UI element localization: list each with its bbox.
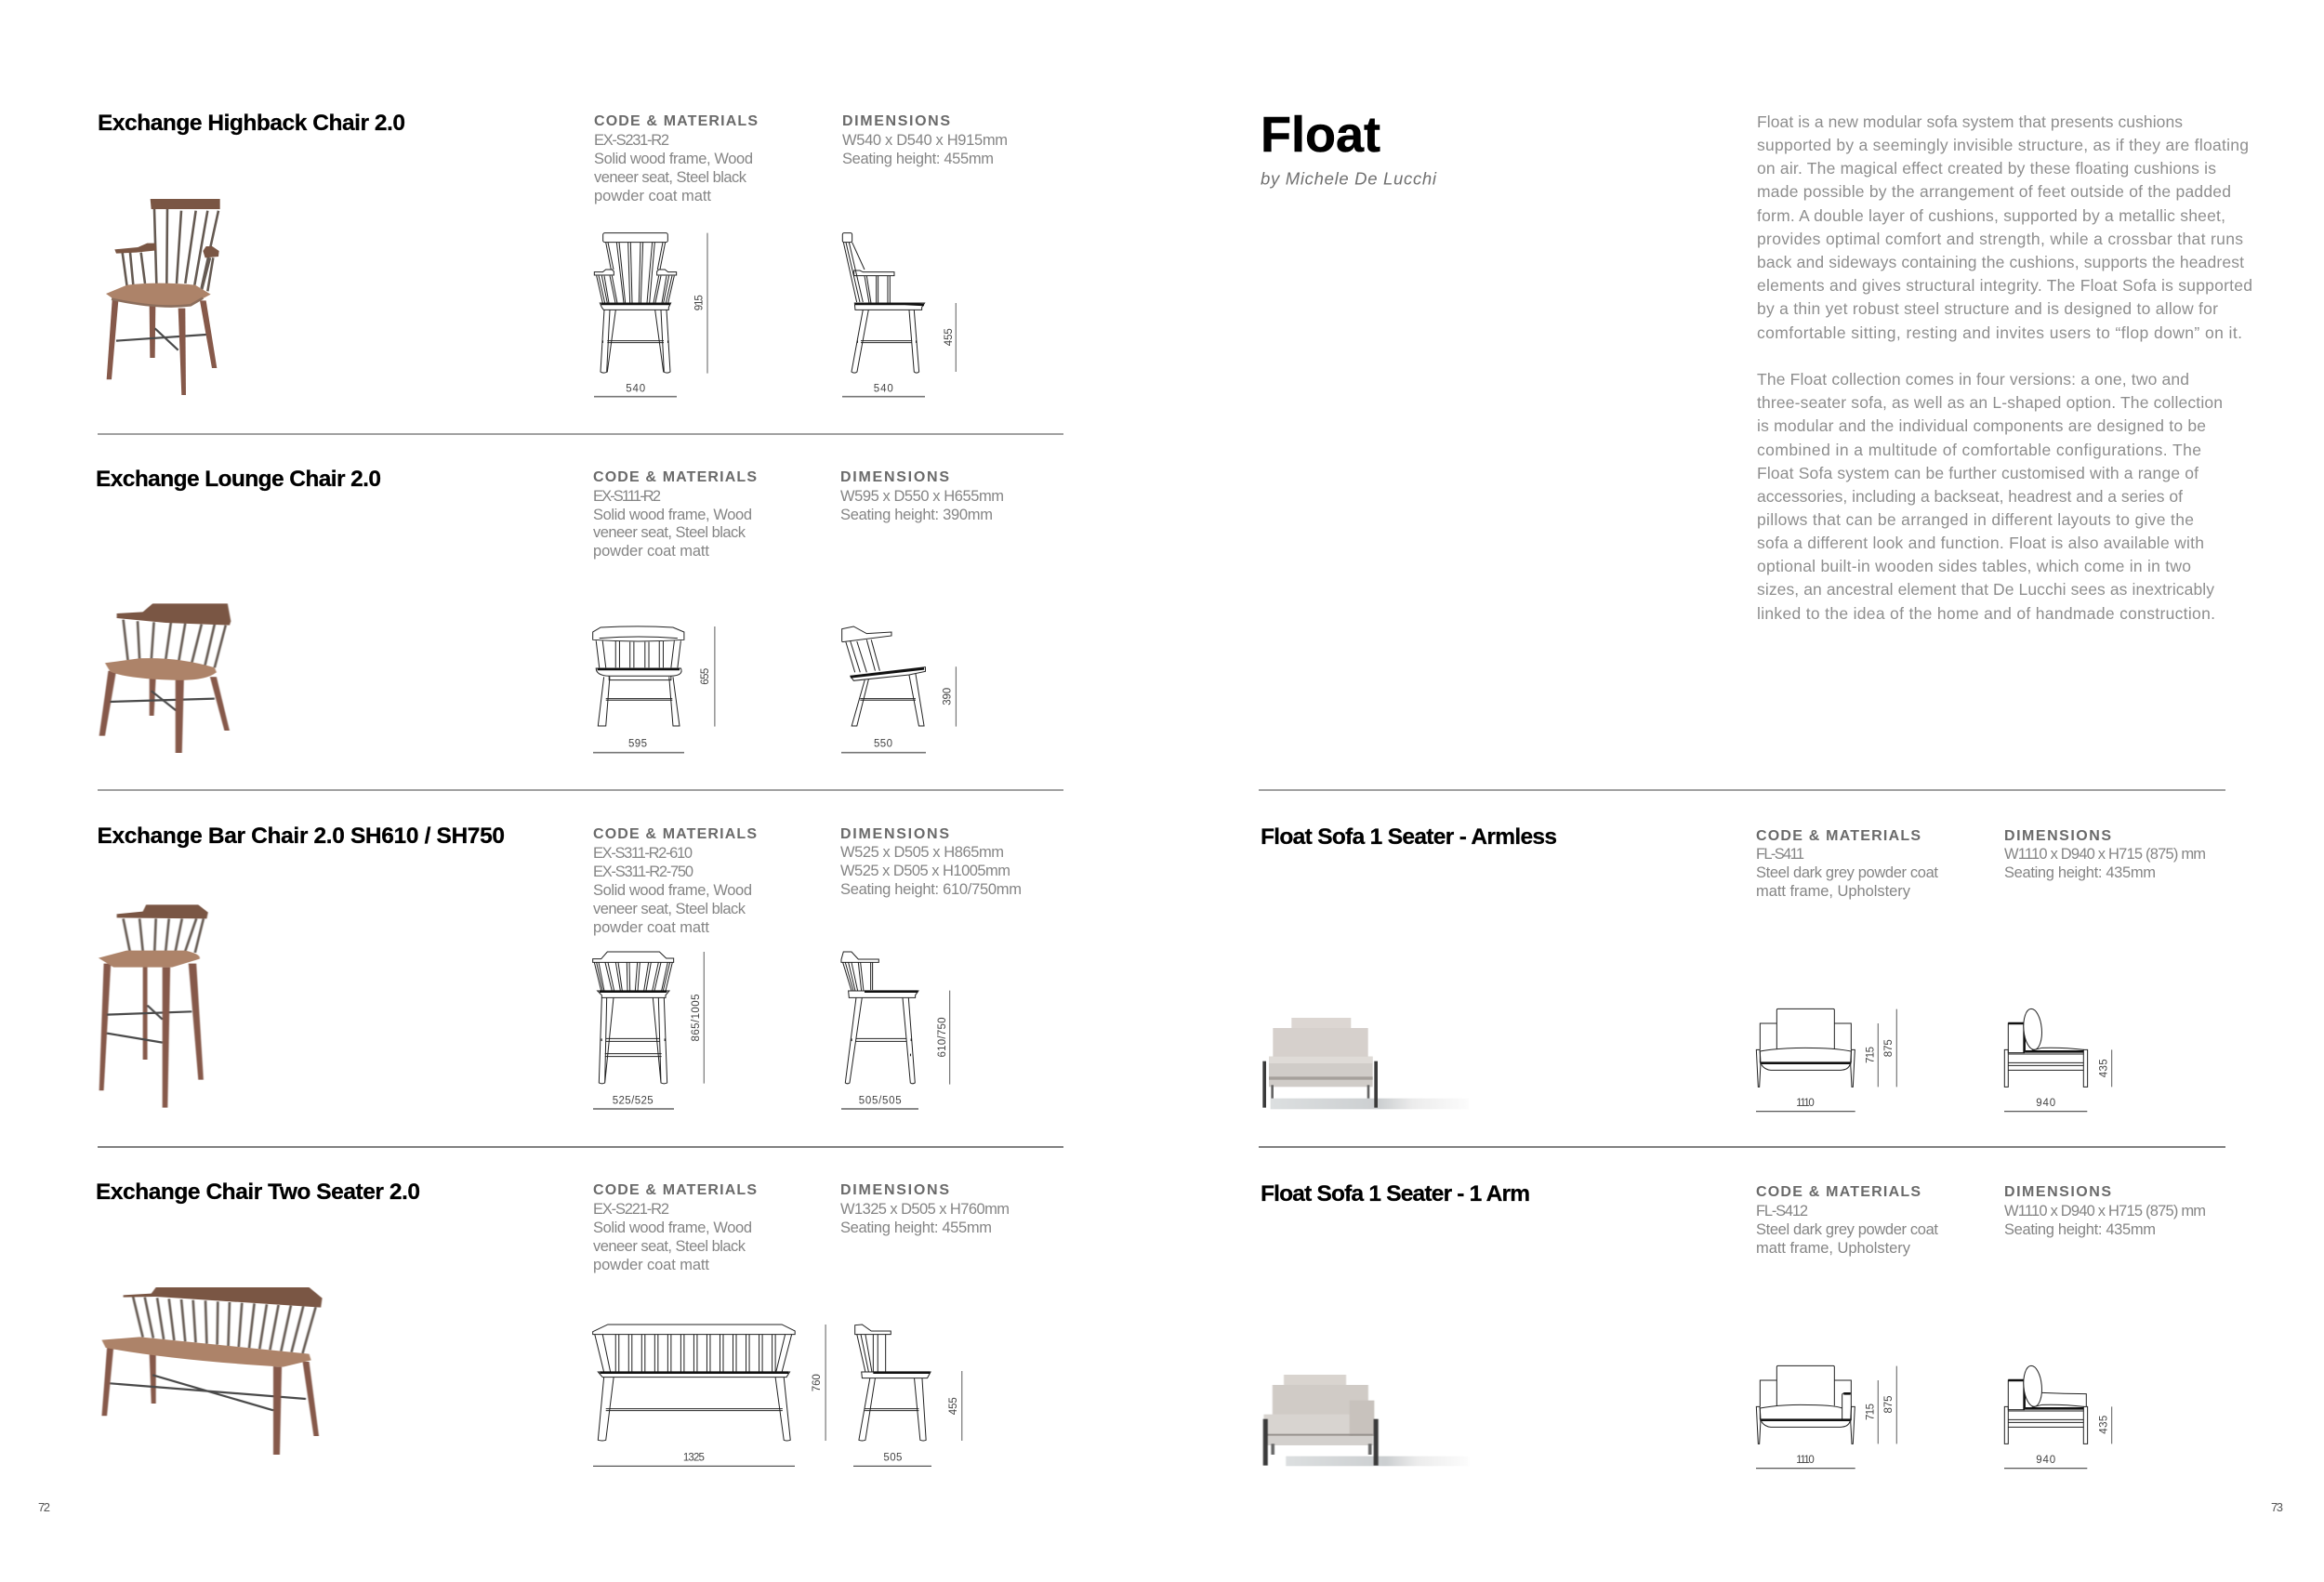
width rules: [593, 752, 926, 754]
drawing: one arm sofa front view: [1756, 1365, 1855, 1444]
dimension: width front: 595: [628, 738, 647, 749]
drawing: bar chair side view: [841, 952, 918, 1084]
dimension: seat height: 455: [944, 328, 955, 346]
paragraph two: The Float collection comes in four versions: a one, two and: [1757, 370, 2189, 389]
product title: Exchange Lounge Chair 2.0: [96, 467, 381, 492]
dimension: seat height: 435: [2099, 1416, 2110, 1434]
dimension: seat height: 610/750: [937, 1017, 948, 1058]
text: code and materials: [593, 1201, 752, 1273]
dimension lines: [1878, 1366, 2112, 1444]
drawing: two seater side view: [855, 1325, 931, 1441]
text: code and materials: powder coat matt: [593, 919, 709, 936]
width rules: [594, 396, 925, 398]
heading: code and materials: CODE & MATERIALS: [593, 1182, 757, 1198]
dimension: width side: 940: [2036, 1098, 2055, 1109]
dimension: height: 655: [700, 668, 711, 685]
paragraph two: linked to the idea of the home and of handmade construction.: [1757, 604, 2215, 623]
text: code and materials: [1756, 1203, 1938, 1257]
product title: Float Sofa 1 Seater - 1 Arm: [1261, 1181, 1530, 1206]
text: dimensions: [840, 1201, 1010, 1236]
dimension: seat height: 435: [2099, 1059, 2110, 1077]
text: code and materials: Steel dark grey powder coat: [1756, 864, 1938, 881]
width rules: [1756, 1111, 2087, 1113]
dimension: width front: 525/525: [613, 1096, 654, 1107]
drawing: armless sofa front view: [1756, 1009, 1855, 1087]
dimension: width side: 540: [874, 384, 893, 395]
dimension: width side: 505/505: [859, 1096, 902, 1107]
text: dimensions: Seating height: 455mm: [842, 151, 994, 167]
text: code and materials: veneer seat, Steel black: [594, 169, 747, 186]
text: dimensions: W595 x D550 x H655mm: [840, 488, 1004, 505]
main title: Float: [1261, 107, 1380, 163]
heading: dimensions: DIMENSIONS: [840, 826, 949, 842]
text: code and materials: Solid wood frame, Wood: [593, 882, 752, 899]
heading: dimensions: DIMENSIONS: [842, 113, 950, 129]
photo: one arm sofa: [1263, 1375, 1468, 1466]
text: code and materials: Steel dark grey powder coat: [1756, 1221, 1938, 1238]
panel: Exchange Lounge Chair 2.0: [96, 467, 1004, 753]
text: dimensions: W1110 x D940 x H715 (875) mm: [2004, 846, 2206, 863]
paragraph two: sizes, an ancestral element that De Lucchi sees as inextricably: [1757, 580, 2214, 599]
width rules: [593, 1465, 931, 1467]
heading: dimensions: DIMENSIONS: [2004, 828, 2111, 844]
paragraph one: made possible by the arrangement of feet outside of the padded: [1757, 182, 2231, 201]
photo: lounge chair: [99, 603, 231, 753]
text: dimensions: W525 x D505 x H1005mm: [840, 863, 1010, 879]
drawing: bar chair front view: [593, 952, 674, 1084]
text: dimensions: Seating height: 390mm: [840, 507, 993, 523]
text: code and materials: EX-S231-R2: [594, 132, 669, 149]
dimension lines: [704, 952, 950, 1085]
text: dimensions: Seating height: 435mm: [2004, 1221, 2156, 1238]
dimension: height: 915: [694, 295, 706, 310]
dimension: seat height: 390: [943, 688, 954, 705]
photo: bar chair: [99, 904, 208, 1108]
paragraph two: is modular and the individual components are designed to be: [1757, 416, 2206, 435]
drawing: lounge chair front view: [593, 626, 684, 726]
paragraph two: accessories, including a backseat, headrest and a series of: [1757, 487, 2183, 506]
paragraph one: comfortable sitting, resting and invites users to “flop down” on it.: [1757, 323, 2242, 342]
text: code and materials: veneer seat, Steel black: [593, 1238, 746, 1255]
panel: Float introduction: [1261, 107, 2252, 623]
text: dimensions: [842, 132, 1008, 167]
text: dimensions: [2004, 1203, 2206, 1238]
drawing: highback chair front view: [594, 233, 677, 373]
paragraph two: Float Sofa system can be further customised with a range of: [1757, 464, 2199, 482]
paragraph two: pillows that can be arranged in different layouts to give the: [1757, 510, 2194, 529]
width rules: [593, 1108, 918, 1110]
paragraph one: Float is a new modular sofa system that presents cushions: [1757, 112, 2183, 131]
product title: Exchange Highback Chair 2.0: [98, 111, 405, 136]
heading: code and materials: CODE & MATERIALS: [1756, 1184, 1921, 1200]
text: code and materials: [594, 132, 753, 204]
text: dimensions: Seating height: 435mm: [2004, 864, 2156, 881]
dimension lines: [1878, 1009, 2112, 1087]
text: code and materials: [593, 488, 752, 560]
paragraph two: [1757, 370, 2223, 623]
dimension lines: [707, 233, 956, 374]
text: code and materials: powder coat matt: [593, 1257, 709, 1273]
text: code and materials: matt frame, Upholstery: [1756, 883, 1911, 900]
text: code and materials: EX-S221-R2: [593, 1201, 669, 1218]
panel: Float Sofa 1 Seater 1 Arm: [1261, 1181, 2206, 1469]
dimension: height with pillow: 875: [1883, 1396, 1895, 1413]
text: code and materials: Solid wood frame, Wood: [593, 1219, 752, 1236]
paragraph one: [1757, 112, 2252, 342]
paragraph one: provides optimal comfort and strength, while a crossbar that runs: [1757, 230, 2243, 248]
paragraph two: optional built-in wooden sides tables, which come in in two: [1757, 557, 2191, 575]
text: code and materials: [1756, 846, 1938, 900]
drawing: lounge chair side view: [842, 626, 925, 726]
width rules: [1756, 1468, 2087, 1470]
text: dimensions: [840, 844, 1022, 898]
heading: dimensions: DIMENSIONS: [840, 469, 949, 485]
paragraph two: sofa a different look and function. Float is also available with: [1757, 534, 2204, 552]
text: code and materials: matt frame, Upholstery: [1756, 1240, 1911, 1257]
dimension lines: [715, 626, 956, 727]
text: code and materials: FL-S411: [1756, 846, 1804, 863]
dimension: height without pillow: 715: [1866, 1047, 1877, 1063]
text: code and materials: veneer seat, Steel black: [593, 901, 746, 917]
paragraph one: on air. The magical effect created by these floating cushions is: [1757, 159, 2216, 178]
page number right: 73: [2271, 1500, 2283, 1514]
dimension: seat height: 455: [948, 1397, 959, 1415]
photo: highback chair: [106, 199, 220, 395]
heading: code and materials: CODE & MATERIALS: [593, 826, 757, 842]
text: dimensions: W1110 x D940 x H715 (875) mm: [2004, 1203, 2206, 1219]
heading: code and materials: CODE & MATERIALS: [593, 469, 757, 485]
dimension: width side: 550: [874, 738, 892, 749]
text: dimensions: W540 x D540 x H915mm: [842, 132, 1008, 149]
paragraph one: supported by a seemingly invisible structure, as if they are floating: [1757, 136, 2249, 154]
drawing: two seater front view: [593, 1325, 795, 1441]
dimension lines: [825, 1325, 962, 1441]
product title: Exchange Bar Chair 2.0 SH610 / SH750: [97, 824, 505, 849]
heading: code and materials: CODE & MATERIALS: [1756, 828, 1921, 844]
text: code and materials: powder coat matt: [593, 543, 709, 560]
dimension: height without pillow: 715: [1866, 1404, 1877, 1420]
text: dimensions: [840, 488, 1004, 523]
heading: dimensions: DIMENSIONS: [2004, 1184, 2111, 1200]
drawing: highback chair side view: [842, 233, 925, 373]
text: code and materials: veneer seat, Steel black: [593, 524, 746, 541]
dimension: width front: 1110: [1796, 1455, 1815, 1466]
text: dimensions: Seating height: 455mm: [840, 1219, 992, 1236]
text: code and materials: Solid wood frame, Wood: [593, 507, 752, 523]
paragraph one: by a thin yet robust steel structure and is designed to allow for: [1757, 299, 2218, 318]
paragraph one: back and sideways containing the cushions, supports the headrest: [1757, 253, 2244, 271]
paragraph two: three-seater sofa, as well as an L-shaped option. The collection: [1757, 393, 2223, 412]
panel: Exchange Chair Two Seater 2.0: [96, 1180, 1010, 1466]
dimension: height: 865/1005: [691, 995, 702, 1041]
product title: Exchange Chair Two Seater 2.0: [96, 1180, 420, 1205]
text: code and materials: FL-S412: [1756, 1203, 1808, 1219]
panel: Exchange Highback Chair 2.0: [98, 111, 1008, 397]
photo: two seater bench: [101, 1287, 323, 1455]
dimension: width front: 1110: [1796, 1098, 1815, 1109]
text: dimensions: Seating height: 610/750mm: [840, 881, 1022, 898]
text: dimensions: W1325 x D505 x H760mm: [840, 1201, 1010, 1218]
photo: armless sofa: [1262, 1018, 1469, 1109]
dimension: width side: 940: [2036, 1455, 2055, 1466]
paragraph one: form. A double layer of cushions, supported by a metallic sheet,: [1757, 206, 2225, 225]
dimension: width front: 1325: [683, 1453, 705, 1464]
text: dimensions: [2004, 846, 2206, 881]
text: code and materials: EX-S111-R2: [593, 488, 661, 505]
text: code and materials: EX-S311-R2-750: [593, 864, 693, 880]
text: code and materials: powder coat matt: [594, 188, 711, 204]
panel: Exchange Bar Chair 2.0: [97, 824, 1022, 1109]
drawing: armless sofa side view: [2004, 1009, 2088, 1087]
designer byline: by Michele De Lucchi: [1261, 169, 1437, 189]
text: code and materials: [593, 845, 752, 936]
product title: Float Sofa 1 Seater - Armless: [1261, 824, 1557, 850]
text: dimensions: W525 x D505 x H865mm: [840, 844, 1004, 861]
panel: Float Sofa 1 Seater Armless: [1261, 824, 2206, 1112]
page number left: 72: [38, 1500, 50, 1514]
dimension: width front: 540: [626, 384, 645, 395]
paragraph two: combined in a multitude of comfortable configurations. The: [1757, 441, 2201, 459]
dimension: width side: 505: [883, 1453, 902, 1464]
text: code and materials: Solid wood frame, Wood: [594, 151, 753, 167]
drawing: one arm sofa side view: [2004, 1365, 2088, 1444]
heading: dimensions: DIMENSIONS: [840, 1182, 949, 1198]
dimension: height with pillow: 875: [1883, 1039, 1895, 1057]
heading: code and materials: CODE & MATERIALS: [594, 113, 758, 129]
dimension: height: 760: [812, 1374, 823, 1391]
paragraph one: elements and gives structural integrity. The Float Sofa is supported: [1757, 276, 2252, 295]
text: code and materials: EX-S311-R2-610: [593, 845, 693, 862]
